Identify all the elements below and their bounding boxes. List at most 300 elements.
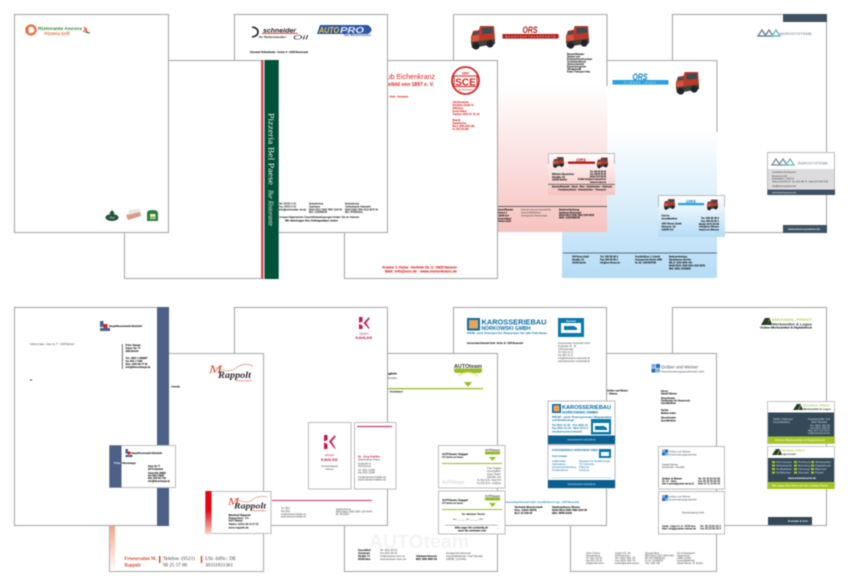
text: Kahlke footer xyxy=(281,506,372,518)
card: Gröber front: Mob 01 71 24 95 16 xyxy=(698,482,720,486)
card: Gröber front xyxy=(658,446,724,489)
card: Maximal-Print back: Logos & mehr xyxy=(781,452,796,456)
card: Autoteam appointment: Ihr nächster Termin xyxy=(462,512,485,516)
text: Karosserie footer: Vorbank Musterstadt xyxy=(514,505,542,509)
card: Autoteam contact: KFZ-Technik und Service xyxy=(442,455,463,459)
sheet: Haupt navy stripe letterhead: Karlheinz Haupt · Kaiser Str. 77 · 33330 Bielefeld xyxy=(30,342,74,346)
card: Haupt business card xyxy=(110,446,176,488)
text: Karosserie address: Karosseriebau Norkowski GmbH xyxy=(558,341,590,345)
card: Autoteam contact: AUTOteam xyxy=(485,448,500,452)
stripe: Pizzeria green band xyxy=(261,60,278,279)
text: footer ORS Baustoff: Baustoffhandel xyxy=(497,208,513,212)
sheet: Karosseriebau Norkowski letterhead: Karosseriebau Norkowski GmbH · Geschäftsführer K. Kgm · 12345 Musterstadt xyxy=(505,500,579,504)
logo: Autoteam xyxy=(454,364,483,387)
card: Autoteam contact: AUTOteam Gaggel xyxy=(442,452,468,456)
text: Karosserie footer: BLZ 12 345 67 xyxy=(514,511,533,515)
text: footer ORS Fliesen xyxy=(572,254,705,270)
card: Maximal-Print front: Frankestraße 114 xyxy=(808,417,831,421)
sheet: Haupt navy stripe letterhead xyxy=(14,307,169,526)
text: footer ORS Baustoff: Geschäftsführer xyxy=(521,210,541,214)
card: Karosserie back: Unfallschäden xyxy=(552,459,566,463)
card: Gröber back xyxy=(658,492,724,534)
text: Gröber footer: IBAN DE12 2507 0024 3456 xyxy=(645,554,674,558)
text: services list: Kiestransporte xyxy=(567,64,586,68)
icon: truck xyxy=(566,26,589,49)
text: footer ORS Fliesen: BLZ 100 500 00 xyxy=(669,260,692,264)
stripe: Pizzeria green band: Bar Ristorante xyxy=(266,190,274,226)
text: Gröber footer: Harald Weiner, M. Gröber xyxy=(677,561,703,565)
card: Maximal-Print front: MAXIMAL-PRINT xyxy=(803,404,830,408)
text: footer ORS Baustoff: Telefon 0123 xyxy=(497,219,511,223)
logo: Karosseriebau Norkowski: PKW- und Transporter-Reparatur für alle Fabrikate xyxy=(467,331,548,335)
text: Autoteam footer xyxy=(358,548,483,561)
text: Gröber footer: Fax 0511 456 79 xyxy=(615,558,635,562)
text: club address: Sparkasse xyxy=(452,121,467,125)
text: Gröber footer: Hannover xyxy=(677,554,690,558)
text: Rappolt footer: 98 25 57 00 xyxy=(163,562,187,568)
card: Karosserie back: Reparatur für Nutzfahrzeuge xyxy=(579,459,610,463)
text: Schneider footer: Volksbank Hameln xyxy=(345,204,371,208)
logo: Maximal-Print: Online-Werbeartikel & Digitaldruck xyxy=(760,326,812,330)
card: Gröber front: Steuerberatungsgesellschaft xyxy=(668,454,697,456)
text: Schneider footer: IBAN DE12 3456 7890 1234 56 xyxy=(309,208,342,212)
text: footer ORS Baustoff: IBAN DE12 3456 7890 1234 5678 xyxy=(559,213,594,217)
icon: truck xyxy=(471,26,495,50)
text: Schneider footer: BIC 87654321 xyxy=(345,210,363,214)
text: Autoteam footer: www.autoteam-hann.de xyxy=(380,557,406,561)
card: ORS Fliesen business card: ORS Fliesen GmbH xyxy=(662,222,682,226)
stripe: Pizzeria green band: Pizzeria Bel Paese xyxy=(266,113,276,186)
text: services list: Containerdienst xyxy=(567,60,586,64)
text: Kahlke footer: IBAN DE12 2505 0180 1234 5678 xyxy=(336,510,372,514)
text: partners list: Harald Weiner xyxy=(661,392,678,396)
sheet: Autoteam letterhead: · Autoteam xyxy=(388,389,404,393)
card: Gröber back: Steuerberatungsgesellschaft xyxy=(668,498,697,502)
text: Karosserie address xyxy=(558,341,590,363)
card: Gröber back: Mail: info@groeber-weiner.de xyxy=(662,526,696,530)
text: Gröber footer: St.-Nr. 12/345/678 xyxy=(645,558,663,562)
card: Gröber front: Fax 05 25 90 63 39 xyxy=(698,479,720,483)
card: Karosserie front: und Nutzfahrzeuge xyxy=(552,418,574,422)
text: Autoteam footer: Tel. 0511 99 33 xyxy=(380,548,397,552)
card: Haupt business card: Hauptfliesenmarkt Bielefeld xyxy=(131,451,162,455)
text: footer ORS Fliesen: info@ors-fliesen.de xyxy=(600,260,620,264)
text: Schneider footer: BIC 12345678 xyxy=(309,210,327,214)
text: Gröber footer: Fax 0511 123 46 xyxy=(586,558,602,562)
sheet: Maximal-Print letterhead xyxy=(672,308,826,526)
text: footer ORS Fliesen: 12345 Berlin xyxy=(572,260,586,264)
card: ORS Fliesen business card: Tel. 055 55 66 0 xyxy=(701,216,719,220)
card: Maximal-Print back: Flyer xyxy=(815,470,824,474)
card: Kahlke back: Schulstraße 12 xyxy=(358,462,371,466)
icon: service car badge: Service xyxy=(566,319,576,323)
text: Schneider footer: Fax: 05151 5 20 xyxy=(279,204,296,208)
text: services list: Kranz Transport Hau xyxy=(567,70,590,74)
icon: truck xyxy=(676,72,699,95)
card: Maximal-Print front: Werbemittel & Logos xyxy=(803,407,832,411)
text: footer ORS Baustoff: Strasse 1 xyxy=(497,210,507,214)
logo: Autoteam: AUTOteam xyxy=(454,364,483,370)
text: footer ORS Fliesen: Geschäftsführer: O. Schmidt xyxy=(635,254,660,258)
text: footer ORS Baustoff: Internet www.ors-baustoff.de xyxy=(521,208,551,212)
watermark: AUTOteam: AUTOteam xyxy=(369,532,469,553)
logo: SCE badge xyxy=(452,67,479,94)
card: ORS Fliesen business card: www.ors-fliesen xyxy=(698,228,719,232)
text: club address: Bank xyxy=(452,118,461,122)
card: Karosserie back: Glasreparatur xyxy=(552,462,566,466)
text: footer ORS Baustoff: Deutschland xyxy=(497,216,511,220)
text: club footer xyxy=(382,266,458,274)
text: footer ORS Fliesen: ORS Fliesen GmbH xyxy=(572,254,589,258)
card: ORS Baustoff business card: E-Mail info@ors-baustoff.de xyxy=(578,177,606,181)
logo: Maximal-Print xyxy=(760,318,813,330)
sheet: ORS Baustofftransporte red letterhead xyxy=(453,14,607,232)
card: Kahlke back xyxy=(354,422,396,489)
card: Kahlke back: Dr. Jörg Kahlke xyxy=(358,454,380,458)
logo: Kahlke xyxy=(356,317,373,340)
logo: Autopro: AUTO xyxy=(318,26,340,35)
card: Rappolt business card: Telefon: (0521) 98 25 57 00 xyxy=(228,522,259,526)
text: Kahlke footer: www.zahnarzt-kahlke.de xyxy=(281,514,306,518)
card: Haupt business card: Mob. 0160 451 7781 xyxy=(148,476,166,480)
card: Kahlke front: KAHLKE xyxy=(321,457,338,462)
card: ORS Baustoff business card: Straße 12 xyxy=(552,175,565,179)
card: Karosserie front: Tel 0521 21 32 · Fax 0521 21 xyxy=(552,423,588,427)
card: Bürosysteme business card xyxy=(768,152,835,195)
card: Maximal-Print front: Online-Werbemittel & Digitaldruck xyxy=(775,438,826,442)
card: Maximal-Print front: 33617 Bielefeld xyxy=(811,420,827,424)
card: Bürosysteme business card: info@buerosysteme.de xyxy=(772,184,796,188)
text: Autoteam footer: Autoteam xyxy=(358,551,370,555)
logo: ORS blue: FLIESEN - Granit xyxy=(624,81,656,85)
card: Kahlke back: Zahnärztliche Praxis xyxy=(358,458,380,462)
text: club address: Telefon 0511 57 11 10 xyxy=(452,112,480,116)
text: Kahlke footer: Fax 0511 xyxy=(281,509,290,513)
text: Gröber footer: kanzlei@groeber-weiner xyxy=(615,561,639,565)
card: ORS Fliesen business card: Frank Oss xyxy=(662,214,670,218)
logo: Gröber und Weiner: Steuerberatungsgesellschaft mbH xyxy=(661,370,704,374)
card: Gröber back: Gröber und Weiner xyxy=(668,494,690,498)
sheet: Pizzeria Bel Paese letterhead xyxy=(124,60,278,279)
logo: Kahlke: Zahnarzt xyxy=(359,332,369,336)
text: footer ORS Baustoff: BIC 12345678 xyxy=(559,216,580,220)
sheet: Rappolt letterhead xyxy=(110,354,264,572)
card: Karosserie back: Lackierung xyxy=(579,468,589,472)
text: Rappolt footer: Rappolt xyxy=(124,562,141,568)
card: ORS Fliesen business card: Fax 055 55 66 1 xyxy=(701,219,719,223)
card: Rappolt business card: M xyxy=(227,497,240,508)
text: club address: Deutschland xyxy=(452,109,467,113)
card: Kahlke back: info@zahnarzt-kahlke.de xyxy=(358,475,386,479)
card: Karosserie back: Kundendienst xyxy=(552,468,568,472)
logo: Bürosysteme triangles xyxy=(758,30,813,36)
card: Karosserie back: Karosserieinstandsetzung xyxy=(552,465,576,469)
sheet: Maximal-Print letterhead: Kontakt & Info xyxy=(788,519,808,523)
sheet: Club Eichenkranz letterhead: · Club · Vorstand xyxy=(388,94,408,98)
text: Karosserie address: 12345 Musterstadt xyxy=(558,347,573,351)
logo: Gröber und Weiner xyxy=(652,364,704,374)
card: ORS Baustoff business card: Fax 055 55 55 56 xyxy=(590,172,606,176)
text: partners list: Steuerberater xyxy=(661,396,676,400)
card: ORS Baustoff business card: ORS xyxy=(576,158,586,162)
card: Maximal-Print back: MAXIMAL-PRINT xyxy=(781,448,805,452)
text: services list: Baustoffhandel xyxy=(567,52,584,56)
text: Schneider footer: Sparkasse xyxy=(309,204,320,208)
text: footer ORS Baustoff: 12345 Ort xyxy=(497,214,509,218)
card: Haupt business card: Fax 0521 179834 xyxy=(148,474,164,478)
card: Karosserie back: www.karosserie-norkowski.de xyxy=(568,483,596,486)
sheet: Gröber und Weiner letterhead: Gröber und Weiner xyxy=(607,388,629,392)
card: Autoteam appointment: KFZ-Technik und Service xyxy=(442,501,463,505)
text: Autoteam footer: Amtsgericht Hannover xyxy=(446,551,471,555)
card: Kahlke back: Fax 0511 12346 xyxy=(358,470,375,474)
icon: green shield xyxy=(147,210,158,221)
card: Autoteam appointment: Bitte sagen Sie rechtzeitig ab xyxy=(455,526,488,530)
text: Haupt address xyxy=(126,343,151,369)
card: Bürosysteme business card: Musterstraße 5 · 12345 Ort xyxy=(772,176,794,180)
card: Kahlke front: Gemeinschaftspraxis xyxy=(321,464,338,468)
text: Schneider footer xyxy=(279,202,378,222)
text: Kahlke footer: info@zahnarzt-kahlke.de xyxy=(281,512,306,516)
card: Maximal-Print back: Kleine Drucksachen xyxy=(776,460,792,464)
text: Gröber footer: Gröber & Weiner xyxy=(586,551,600,555)
sheet: Autoteam letterhead: gbh xyxy=(388,372,397,376)
icon: green leaf emblem: Gut xyxy=(110,216,115,220)
logo: Gröber und Weiner: Gröber und Weiner xyxy=(661,364,699,370)
card: Haupt business card: Fliesenleger xyxy=(122,461,137,465)
sheet: Gröber und Weiner letterhead: · Hann. xyxy=(607,392,618,396)
card: Karosserie front: PKW- und Transporter-Reparatur xyxy=(552,415,613,419)
text: club address: Club Eichenkranz xyxy=(452,100,469,104)
logo: Autopro: PRO xyxy=(340,26,365,35)
text: Schneider footer: Wir übertragen Ihre Auftragsdaten sicher xyxy=(285,218,339,222)
text: partners list: Herrn xyxy=(661,389,668,393)
text: Karosserie address: info@karosserie-norkowski.de xyxy=(558,356,590,360)
text: partners list: Fachberater für Steuerrecht xyxy=(661,398,690,402)
text: club footer: Mail: info@sce.de · www.eichenkranz.de xyxy=(385,270,457,274)
card: Maximal-Print back: Fahrzeuge xyxy=(798,467,811,471)
text: Gröber footer: BIC DEUTDEDBHAN xyxy=(645,556,665,560)
card: Autoteam contact: Geschäftsf. xyxy=(487,469,501,473)
card: Maximal-Print front: Geschäftsführer xyxy=(773,420,790,424)
text: Autoteam footer: HRB 12345 xyxy=(446,557,466,561)
text: Gröber footer: HRB 12345 xyxy=(677,556,691,560)
title: Club Eichenkranz: Kleefeld von 1897 e. V. xyxy=(381,82,435,88)
sheet: ORS Fliesen blue letterhead xyxy=(562,60,717,278)
text: Rappolt footer: Telefon: (0521) xyxy=(163,555,195,562)
card: Maximal-Print back: www.maximal-print.de xyxy=(787,476,816,480)
logo: Rappolt: M xyxy=(208,362,223,376)
icon: green leaf emblem xyxy=(106,210,118,221)
sheet: Club Eichenkranz letterhead xyxy=(344,60,498,278)
text: partners list: Geschäftsführer xyxy=(661,401,677,405)
sheet: Autoteam letterhead xyxy=(344,354,498,572)
text: footer ORS Baustoff: Bankverbindung xyxy=(559,208,579,212)
icon: green shield: IHK xyxy=(150,215,156,219)
card: Rappolt business card: Friseursalon xyxy=(251,508,267,512)
logo: Schneider wrench: Oil xyxy=(293,36,309,42)
logo: Rappolt xyxy=(208,362,253,382)
card: Karosserie front: info@karosserie-norkowski xyxy=(552,430,582,434)
card: Gröber front: Str. 14 · Hann. xyxy=(662,479,677,483)
logo: Maximal-Print: Werbemittel & Logos xyxy=(772,322,812,326)
text: Karosserie footer xyxy=(514,505,587,515)
text: Gröber footer: Sitz und Registergericht xyxy=(677,551,695,555)
text: Gröber footer: 30159 Hannover xyxy=(615,554,630,558)
card: Gröber front: Steuerberater · Geschäftsf. xyxy=(662,465,685,469)
card: Bürosysteme business card: BÜROSYSTEME xyxy=(798,162,829,166)
text: services list xyxy=(567,52,592,74)
card: ORS Fliesen business card: Geschäftsführer xyxy=(662,216,678,220)
logo: Kahlke: KAHLKE xyxy=(356,335,373,340)
card: Autoteam appointment: AUTOteam xyxy=(485,494,500,498)
text: footer ORS Fliesen: Sparkasse Berlin xyxy=(669,258,691,262)
logo: Ristorante Ancora xyxy=(26,26,90,36)
card: Maximal-Print back: Aufkleber xyxy=(776,467,792,471)
card: Maximal-Print back: Schilderbau xyxy=(776,470,792,474)
text: footer ORS Fliesen: Tel. 030 55 66 0 xyxy=(600,254,618,258)
logo: Haupt: Hauptfliesenmarkt Bielefeld xyxy=(109,324,142,328)
card: Gröber back: Kanzlei · Gröber Str. 14 · 30159 Hann. xyxy=(662,524,696,528)
card: Gröber back: Fax 05 25 90 63 4 xyxy=(700,526,721,530)
card: Maximal-Print back: Wir sagen Ihre Ideen auf das richtige Papier xyxy=(772,484,828,488)
text: Gröber footer: Steuerberatung xyxy=(586,554,600,558)
text: footer ORS Fliesen: IBAN DE12 1005 0000 1234 5678 xyxy=(669,264,705,268)
card: Maximal-Print front xyxy=(768,402,834,444)
card: Rappolt business card: Manfred Rappolt xyxy=(228,513,250,517)
card: Maximal-Print back xyxy=(768,446,834,489)
text: Karosserie address: Fax 0521 21 33 xyxy=(558,353,573,357)
card: Autoteam contact: Auto-Team xyxy=(487,472,501,476)
logo: ORS red: ORS xyxy=(522,25,538,35)
card: Autoteam contact: Tel. 0511 99 33 · Mobil 0170 xyxy=(477,478,501,482)
text: Schneider footer: IBAN DE98 7654 3210 9876 54 xyxy=(345,208,378,212)
card: Maximal-Print front: Fax 0521 260 07 xyxy=(810,426,831,430)
card: Karosserie front: NORKOWSKI GMBH xyxy=(562,410,598,414)
text: club footer: Vorstand: E. Fischer · Kleefelder Str. 12 · 30625 Hannover xyxy=(382,266,458,270)
text: Gröber footer: info@groeber-weiner xyxy=(586,561,604,565)
sheet: Gröber und Weiner letterhead xyxy=(570,354,716,572)
sheet: Karosseriebau Norkowski letterhead: Karosseriebau Norkowski GmbH · Dorfstr. 18 · 12345 Musterstadt xyxy=(467,341,523,345)
sheet: Schneider + Autopro letterhead xyxy=(234,14,388,232)
card: Karosserie front xyxy=(548,401,615,444)
card: ORS Baustoff business card xyxy=(548,153,615,195)
sheet: Schneider + Autopro letterhead: Schneider Reifenhändler · Dorfstr. 5 · 12345 Musterstadt xyxy=(250,50,308,54)
card: ORS Fliesen business card: ORS xyxy=(686,199,696,204)
text: Autoteam footer: Geschäftsf. xyxy=(358,548,371,552)
text: Rappolt footer xyxy=(124,555,237,568)
sheet: Bürosysteme letterhead: www.buerosysteme.de xyxy=(788,227,821,231)
text: Autoteam footer: Volksbank Hannover xyxy=(416,554,438,558)
text: footer ORS Fliesen: St.-Nr. 12/345/6789 xyxy=(635,260,656,264)
text: Haupt address: 33330 Bielefeld xyxy=(126,349,139,353)
logo: Karosseriebau Norkowski: NORKOWSKI GMBH xyxy=(482,326,531,332)
card: Karosserie back: TÜV Vorbereitung xyxy=(579,462,594,466)
logo: SCE badge: Eichenkranz xyxy=(458,88,473,92)
card: ORS Baustoff business card: Mobil 0170 55 55 xyxy=(590,174,606,178)
text: Kahlke footer: BIC SPKHDE2H xyxy=(336,512,349,516)
card: Haupt business card: Telefon 0521 1386987 xyxy=(148,471,166,475)
text: Schneider footer: Tel: 05151 5 10 xyxy=(279,202,296,206)
sheet: Bürosysteme letterhead xyxy=(672,14,827,233)
text: Autoteam footer: Fax 0511 99 34 xyxy=(380,551,397,555)
logo: SCE badge: 1897 xyxy=(462,72,469,76)
card: ORS Baustoff business card: Tel. 055 55 55 55 xyxy=(590,170,606,174)
card: Haupt business card: Kaiser Str. 77 xyxy=(148,464,160,468)
text: partners list: Geschäftsführer xyxy=(661,418,677,422)
text: footer ORS Baustoff: Amtsgericht Musterstadt xyxy=(521,214,547,218)
text: footer ORS Baustoff: Sparkasse Musterstadt xyxy=(559,210,581,214)
text: Gröber footer: USt.-IdNr. DE xyxy=(645,561,660,565)
text: services list: Abbrucharbeit xyxy=(567,62,584,66)
sheet: Kahlke letterhead xyxy=(234,308,388,526)
card: Gröber front: Tel. 05 25 90 63 38 xyxy=(698,476,720,480)
card: ORS Baustoff business card: Containerdienst · Kranarbeiten · Transport xyxy=(558,188,606,192)
sheet: Autoteam letterhead: Straße xyxy=(388,376,397,380)
text: Autoteam footer: BIC 250 900 00 xyxy=(416,557,437,561)
sheet: Ristorante Ancora letterhead xyxy=(14,14,168,232)
card: ORS Fliesen business card: info@ors-fliesen xyxy=(699,224,719,228)
logo: Haupt xyxy=(100,321,142,331)
card: Kahlke back: 30159 Hannover xyxy=(358,464,371,468)
text: Autoteam footer: Straße 17 xyxy=(358,554,370,558)
text: Gröber footer: Geschäftsführer xyxy=(677,558,695,562)
card: Maximal-Print back: Textildruck xyxy=(798,460,811,464)
card: ORS Baustoff business card: Wilhelm Musterfrau xyxy=(552,172,574,176)
card: ORS Baustoff business card: Baustoffhandel · Sand · Kies · Erdarbeiten · Abbruch xyxy=(552,184,612,188)
card: Karosserie back xyxy=(548,445,615,488)
card: Gröber front: Harald Weiner xyxy=(662,462,678,466)
card: Kahlke front: Zahnarzt xyxy=(325,454,335,457)
text: Haupt address: info@fliesenhaupt.de xyxy=(126,365,151,369)
card: Bürosysteme business card: Bürosysteme GmbH xyxy=(772,174,787,178)
text: Rappolt footer: USt.-IdNr.: DE xyxy=(205,556,237,562)
card: Kahlke front: Hannover xyxy=(326,467,334,471)
sheet: Rappolt letterhead: · Anrede xyxy=(170,384,180,388)
card: ORS Baustoff business card: www.ors-bau.de xyxy=(589,180,606,184)
text: Rappolt footer: Friseursalon M. xyxy=(124,556,157,562)
logo: ORS blue xyxy=(612,72,668,85)
text: Gröber footer: Deutsche Bank xyxy=(645,551,659,555)
card: Rappolt business card: 33617 Bielefeld xyxy=(228,518,243,522)
card: Karosserie front: KAROSSERIEBAU xyxy=(562,405,611,411)
text: Gröber footer xyxy=(586,551,703,565)
card: Karosserie back: Unsere Leistungen xyxy=(552,454,567,458)
logo: Bürosysteme triangles: BÜROSYSTEME xyxy=(780,32,813,36)
text: Gröber footer: Tel. 0511 123 45 xyxy=(586,556,602,560)
text: Schneider footer: Bankverbindung xyxy=(345,202,359,206)
card: Autoteam contact: 30159 Ort xyxy=(487,475,501,479)
text: partners list xyxy=(661,389,690,422)
text: club address: Kt. 910 145 288 xyxy=(452,127,469,131)
text: Karosserie address: www.karosserie-norkowski.de xyxy=(558,359,590,363)
card: Maximal-Print front: Mob. 0171 123 45 67 xyxy=(808,428,830,432)
text: Haupt address: Tel.: 0521 1 386987 xyxy=(126,356,148,360)
card: Autoteam contact: AUTOteam xyxy=(442,480,464,486)
text: Autoteam footer: Geschäftsführer: Karl Sander xyxy=(446,554,483,558)
card: Maximal-Print back: Beschriftung xyxy=(798,464,810,468)
card: Autoteam contact xyxy=(438,446,505,488)
card: ORS Baustoff business card: 12345 Berlin xyxy=(552,178,567,182)
text: Karosserie footer: Kto. 1234 5678 xyxy=(514,508,537,512)
card: Kahlke back: Tel. 0511 12345 xyxy=(358,468,375,472)
text: Schneider footer: Bankverbindung xyxy=(309,202,323,206)
text: Autoteam footer: info@autoteam-hann.de xyxy=(380,554,405,558)
card: Gröber front: Gröber & Weiner xyxy=(662,476,683,480)
card: Karosserie front: Fax 0521 21 33 · Mob 0171 2 xyxy=(552,426,588,430)
logo: Autopro xyxy=(317,25,372,37)
text: Haupt address: Kaiser Str. 77 xyxy=(126,346,141,350)
